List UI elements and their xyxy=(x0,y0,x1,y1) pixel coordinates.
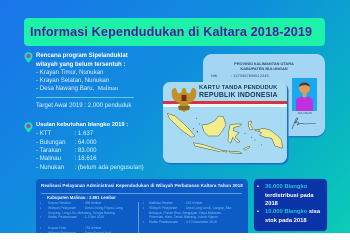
column: malinau selatan: Peternian, Haru, Tanah Bilarang, Lubuk Hijaum xyxy=(149,215,218,219)
icon: location pin bottom xyxy=(24,122,32,132)
id card: front xyxy=(163,82,287,163)
panel: blangko stats: stok pada 2018 xyxy=(265,218,307,224)
map of Indonesia xyxy=(167,113,283,154)
column: malinau selatan: : 4-10 November 2018 xyxy=(184,220,217,224)
text block: rencana program: wilayah yang belum tersentuh : xyxy=(36,62,125,68)
panel: realisasi pelayanan xyxy=(36,179,248,239)
text block: usulan kebutuhan blangko xyxy=(36,122,144,170)
column: malinau selatan: : 243 lembar xyxy=(184,201,202,205)
column: kabupaten malinau details: • xyxy=(40,206,41,210)
heading: kabupaten malinau: Kabupaten Malinau : 2.861 Lembar xyxy=(47,195,116,200)
title: Informasi Kependudukan di Kaltara 2018-2019 xyxy=(30,24,312,38)
text block: rencana program: - Krayan Timur, Nunukan xyxy=(36,69,103,76)
icon: garuda emblem xyxy=(172,88,196,112)
panel: blangko stats: 10.000 Blangko sisa xyxy=(265,209,320,215)
red stripe xyxy=(163,101,287,104)
text block: usulan kebutuhan blangko: - Malinau xyxy=(36,155,61,162)
column: malinau selatan: Malinau Selatan xyxy=(149,201,173,205)
text block: usulan kebutuhan blangko: : 83.000 xyxy=(74,147,97,154)
text block: usulan kebutuhan blangko: Usulan kebutuhan blangko 2019 : xyxy=(36,122,128,128)
text block: usulan kebutuhan blangko: : 1.637 xyxy=(74,130,93,137)
panel: realisasi pelayanan: Realisasi Pelayanan Administrasi Kependudukan di Wilayah Perbatasan Kaltara Tahun 2018 xyxy=(41,183,243,188)
id card: back: BULUNGAN xyxy=(298,112,312,115)
text block: rencana program: - Desa Nawang Baru, Malinau xyxy=(36,85,118,92)
column: kabupaten malinau details: : 495 lembar xyxy=(83,201,101,205)
column: kabupaten malinau details: Krayan Hulu xyxy=(48,226,66,230)
column: kabupaten malinau details: • xyxy=(40,201,41,205)
icon: location pin top xyxy=(24,52,32,63)
signature xyxy=(292,118,316,130)
column: kabupaten malinau details xyxy=(40,201,123,233)
column: malinau selatan: : Desa Long Lorok, Langap, Bila xyxy=(184,206,231,210)
text block: usulan kebutuhan blangko: - Bulungan xyxy=(36,138,65,146)
id card: back: KABUPATEN BULUNGAN xyxy=(240,66,288,71)
column: kabupaten malinau details: • xyxy=(40,215,41,219)
title xyxy=(24,18,325,46)
panel: blangko stats: 36.000 Blangko xyxy=(265,184,307,190)
column: kabupaten malinau details: Ampung, Long Uro, Metulang, Sungai Barang xyxy=(48,211,115,215)
panel: blangko stats: • xyxy=(257,209,259,215)
column: kabupaten malinau details: : 733 lembar xyxy=(83,226,101,230)
id card: back: : 1470567898512345 xyxy=(231,74,269,78)
text block: usulan kebutuhan blangko: - Nunukan xyxy=(36,164,64,170)
panel: blangko stats: • xyxy=(257,184,259,190)
column: kabupaten malinau details: Krayan Selatan xyxy=(48,201,71,205)
id card: back: NIK xyxy=(211,74,217,78)
column: kabupaten malinau details: : 1-5 Mei 2018 xyxy=(83,215,104,219)
text block: usulan kebutuhan blangko: : (belum ada pengusulan) xyxy=(74,164,144,170)
text block: usulan kebutuhan blangko: - KTT xyxy=(36,130,51,137)
column: malinau selatan: Wilayah Pelayanan xyxy=(149,206,177,210)
column: malinau selatan: • xyxy=(143,220,144,224)
column: malinau selatan xyxy=(143,201,232,224)
column: malinau selatan: • xyxy=(143,206,144,210)
id card: front: REPUBLIK INDONESIA xyxy=(199,92,278,99)
id card: back xyxy=(203,54,325,136)
id card: back: PROVINSI KALIMANTAN UTARA xyxy=(234,61,294,66)
column: malinau selatan: • xyxy=(143,201,144,205)
column: kabupaten malinau details: : Desa Lidung Payau, Long xyxy=(83,206,123,210)
white stripe xyxy=(163,104,287,107)
panel: blangko stats: 2018 xyxy=(265,201,278,207)
text block: rencana program: - Krayan Selatan, Nunukan xyxy=(36,77,109,84)
column: kabupaten malinau details: Wilayah Pelayanan xyxy=(48,206,76,210)
column: kabupaten malinau details: Waktu Pelaksanaan xyxy=(48,215,77,219)
text block: usulan kebutuhan blangko: : 18.616 xyxy=(74,155,97,162)
id card: front: KARTU TANDA PENDUDUK xyxy=(199,84,277,90)
text block: rencana program xyxy=(36,52,134,109)
column: malinau selatan: Bekayuk, Punan Rian, Bengayan, Raya Batumas, xyxy=(149,211,222,215)
panel: blangko stats xyxy=(254,179,327,231)
photo: person xyxy=(292,78,317,111)
text block: rencana program: Rencana program Sipelanduklat xyxy=(36,53,128,59)
panel: blangko stats: terdistribusi pada xyxy=(265,193,314,199)
column: kabupaten malinau details: • xyxy=(40,226,41,230)
text block: usulan kebutuhan blangko: : 64.000 xyxy=(74,138,97,146)
text block: usulan kebutuhan blangko: - Tarakan xyxy=(36,147,61,154)
text block: rencana program: Target Awal 2019 : 2.000 penduduk xyxy=(36,102,131,109)
column: malinau selatan: Waktu Pelaksanaan xyxy=(149,220,178,224)
